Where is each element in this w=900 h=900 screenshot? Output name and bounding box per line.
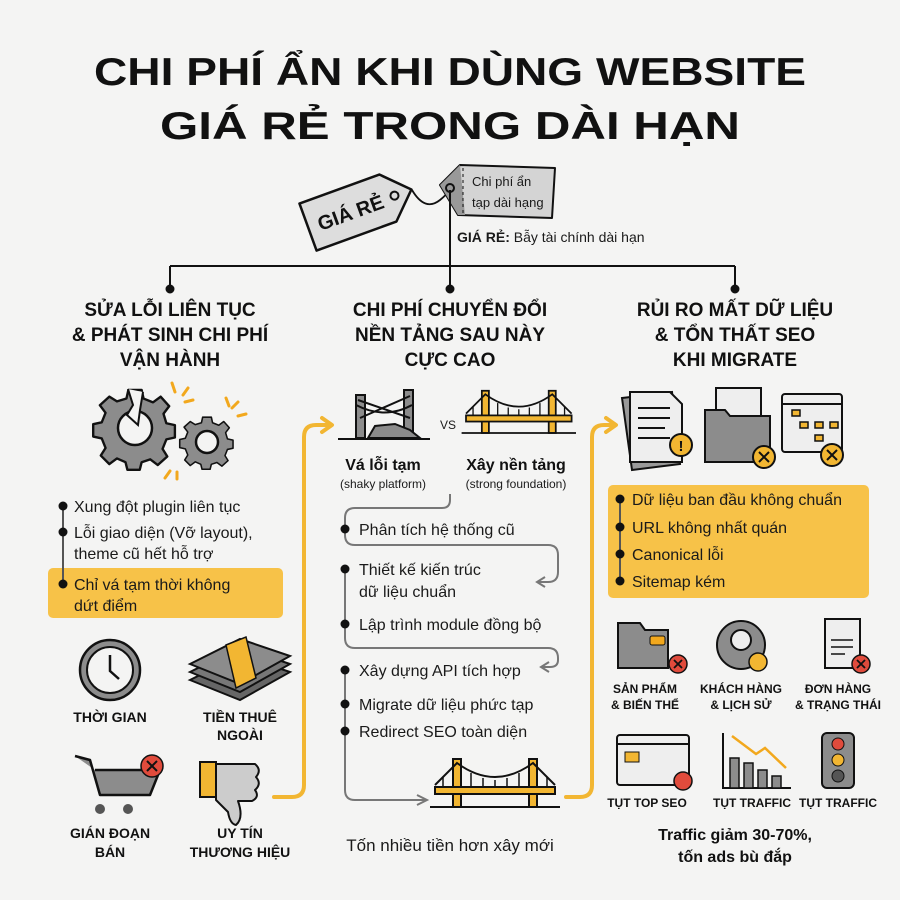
heading: middle	[353, 299, 547, 371]
bullet list: left: theme cũ hết hỗ trợ	[74, 544, 214, 563]
heading: right	[637, 299, 833, 371]
icon: strong bridge: (strong foundation)	[466, 477, 566, 491]
heading: middle: CHI PHÍ CHUYỂN ĐỔI	[353, 299, 547, 321]
heading: right: RỦI RO MẤT DỮ LIỆU	[637, 299, 833, 321]
icon: order: & TRẠNG THÁI	[795, 697, 881, 712]
icon: traffic chart: TỤT TRAFFIC	[713, 796, 791, 810]
icon: shaky bridge	[338, 390, 456, 491]
heading: left: VẬN HÀNH	[120, 349, 220, 371]
title: GIÁ RẺ TRONG DÀI HẠN	[160, 104, 740, 148]
icon: money stack: TIỀN THUÊ	[203, 708, 277, 725]
caption: middle: Tốn nhiều tiền hơn xây mới	[346, 836, 554, 855]
icon: money stack	[190, 637, 290, 743]
icon: price tags: tạp dài hạng	[472, 195, 544, 210]
icon: top seo: TỤT TOP SEO	[607, 796, 687, 810]
icon: cart: BÁN	[95, 844, 125, 860]
icon: clock: THỜI GIAN	[73, 708, 147, 725]
flow steps: dữ liệu chuẩn	[359, 583, 456, 601]
bullet list: left: Lỗi giao diện (Vỡ layout),	[74, 523, 253, 542]
caption: right: Traffic giảm 30-70%,	[658, 827, 812, 844]
icon: customer: KHÁCH HÀNG	[700, 681, 782, 696]
title: CHI PHÍ ẨN KHI DÙNG WEBSITE	[94, 49, 806, 94]
icon: traffic chart	[713, 733, 791, 810]
icon: cart	[70, 755, 163, 860]
icon: thumbs down: UY TÍN	[217, 825, 263, 841]
bullet list: left: dứt điểm	[74, 597, 137, 615]
bullet list: right: Canonical lỗi	[632, 545, 724, 564]
caption: right: tốn ads bù đắp	[678, 847, 792, 866]
icon: strong bridge: Xây nền tảng	[466, 457, 566, 474]
icon: products	[611, 623, 687, 712]
panel: right column	[607, 299, 881, 866]
bullet list: left	[48, 499, 283, 618]
title	[94, 49, 806, 148]
icon: money stack: NGOÀI	[217, 727, 263, 743]
icon: cart: GIÁN ĐOẠN	[70, 825, 150, 841]
bullet list: right: Sitemap kém	[632, 574, 725, 591]
arrow: middle to right	[566, 418, 616, 797]
icon: thumbs down: THƯƠNG HIỆU	[190, 843, 290, 860]
flow steps: Xây dựng API tích hợp	[359, 663, 521, 680]
icon: products: SẢN PHẨM	[613, 681, 677, 696]
icon: new bridge	[430, 759, 560, 807]
flow steps: Redirect SEO toàn diện	[359, 724, 527, 741]
icon: price tags	[299, 165, 555, 251]
icon: broken gears	[93, 383, 246, 479]
icon: traffic light: TỤT TRAFFIC	[799, 796, 877, 810]
connector tree	[166, 190, 738, 292]
panel: middle column	[338, 299, 576, 855]
icon: customer: & LỊCH SỬ	[710, 697, 772, 712]
heading: middle: CỰC CAO	[405, 350, 495, 371]
heading: left	[72, 299, 269, 371]
icon: order	[795, 619, 881, 712]
bullet list: right: URL không nhất quán	[632, 520, 787, 537]
icon: traffic light	[799, 733, 877, 810]
subtitle: trap: GIÁ RẺ: Bẫy tài chính dài hạn	[457, 229, 645, 245]
heading: left: SỬA LỖI LIÊN TỤC	[84, 299, 256, 321]
icon: strong bridge	[462, 391, 576, 491]
icon: products: & BIẾN THỂ	[611, 697, 679, 712]
caption: right	[658, 827, 812, 866]
flow steps: Migrate dữ liệu phức tạp	[359, 697, 534, 714]
icon: clock	[73, 640, 147, 725]
icon: price tags: Chi phí ẩn	[472, 174, 531, 189]
flow steps: Lập trình module đồng bộ	[359, 617, 541, 634]
bullet list: right	[608, 485, 869, 598]
panel: left column	[48, 299, 290, 860]
icon: thumbs down	[190, 762, 290, 860]
icon: order: ĐƠN HÀNG	[805, 681, 871, 696]
arrow: left to middle	[274, 418, 332, 797]
heading: middle: NỀN TẢNG SAU NÀY	[355, 324, 545, 346]
icon: shaky bridge: Vá lỗi tạm	[345, 455, 421, 474]
flow steps	[340, 494, 558, 805]
icons: documents, folder, sitemap	[622, 388, 843, 470]
heading: right: KHI MIGRATE	[673, 350, 797, 371]
heading: left: & PHÁT SINH CHI PHÍ	[72, 324, 269, 346]
icon: customer	[700, 621, 782, 712]
icon: top seo	[607, 735, 692, 810]
flow steps: Phân tích hệ thống cũ	[359, 522, 515, 539]
icon: shaky bridge: VS	[440, 418, 456, 432]
flow steps: Thiết kế kiến trúc	[359, 562, 481, 579]
heading: right: & TỔN THẤT SEO	[655, 324, 815, 346]
icon: price tags: GIÁ RẺ	[315, 191, 387, 236]
bullet list: left: Xung đột plugin liên tục	[74, 499, 240, 516]
icons: documents, folder, sitemap: !	[678, 438, 684, 455]
icon: shaky bridge: (shaky platform)	[340, 477, 426, 491]
bullet list: right: Dữ liệu ban đầu không chuẩn	[632, 491, 842, 509]
bullet list: left: Chỉ vá tạm thời không	[74, 577, 230, 594]
